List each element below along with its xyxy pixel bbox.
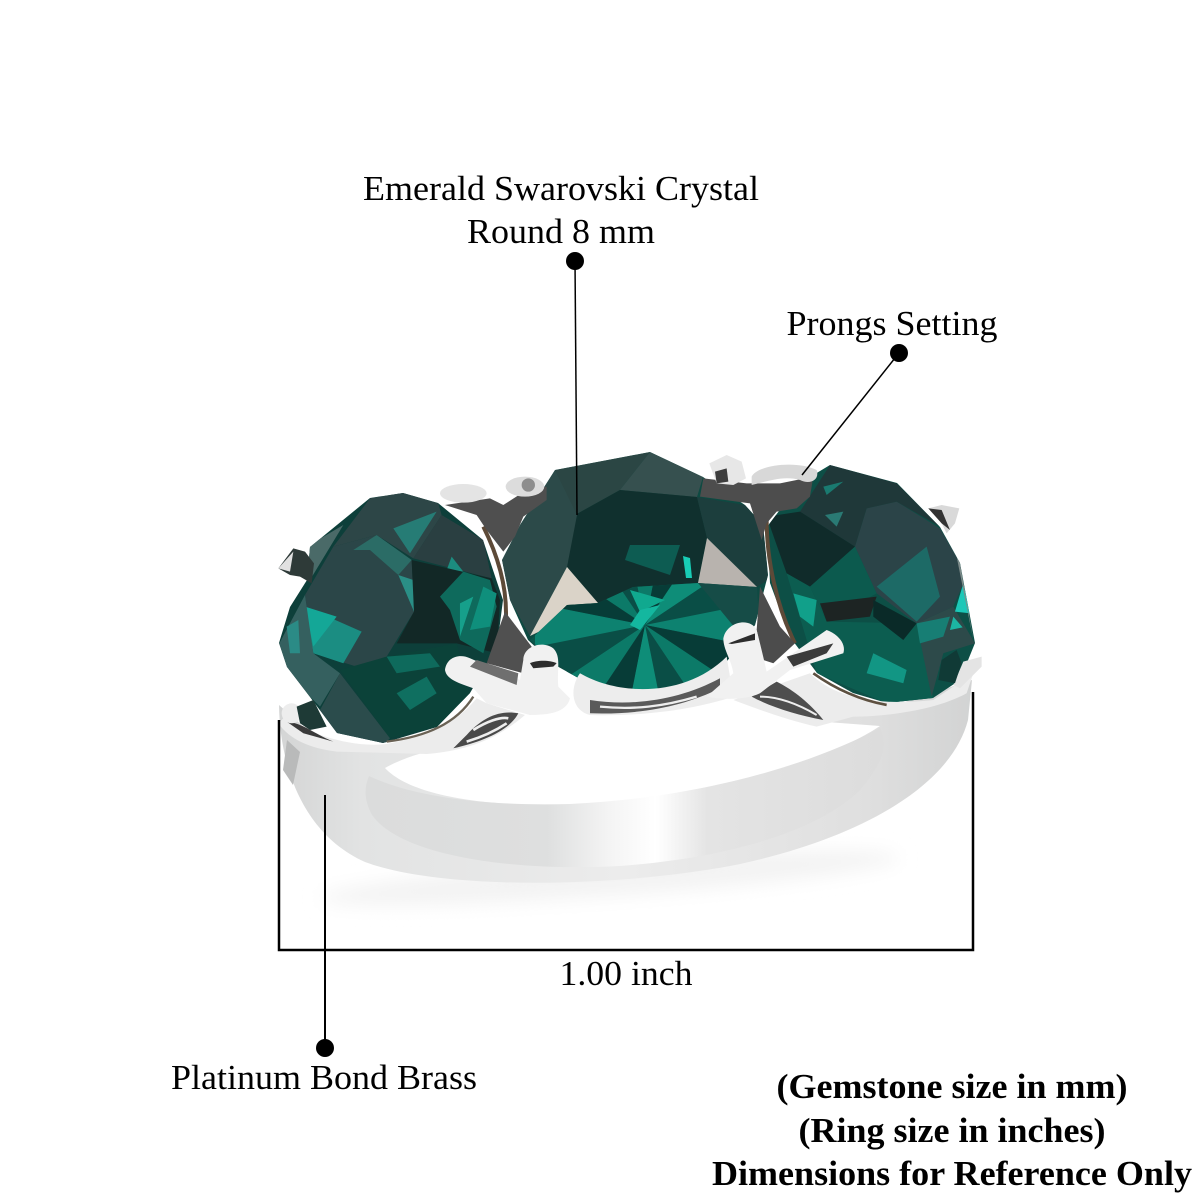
leader line — [802, 353, 899, 475]
bezel edge — [767, 520, 795, 643]
dimension label: 1.00 inch — [560, 954, 693, 993]
label: brass: Platinum Bond Brass — [171, 1058, 477, 1097]
side prong — [278, 548, 314, 583]
lower-left prong — [282, 703, 302, 723]
crossed prongs — [445, 645, 570, 715]
leader line — [324, 795, 326, 1048]
lower right prong — [953, 657, 982, 688]
right gemstone — [768, 465, 975, 702]
bracket lines — [279, 692, 973, 950]
note line 1: (Gemstone size in mm) — [776, 1067, 1128, 1106]
dimension bracket — [279, 692, 973, 993]
centre gemstone — [502, 452, 768, 690]
note: dimensions — [712, 1067, 1193, 1193]
label: round size: Round 8 mm — [467, 212, 655, 251]
left gemstone — [279, 493, 503, 743]
ring shadow — [319, 840, 901, 916]
crossed prongs — [707, 622, 844, 699]
note line 3: Dimensions for Reference Only — [712, 1154, 1193, 1193]
upper metal — [700, 477, 813, 540]
prong setting right — [573, 455, 982, 727]
label: prongs: Prongs Setting — [786, 304, 998, 343]
centre basket arc — [573, 657, 733, 715]
prong setting left — [278, 477, 570, 754]
left basket — [278, 698, 525, 754]
ring band — [279, 680, 972, 883]
leader line — [575, 261, 577, 515]
bezel edge — [483, 527, 506, 657]
lower dark post — [487, 612, 532, 673]
far prong — [928, 505, 959, 533]
ring illustration — [270, 448, 982, 916]
callout dot — [316, 1039, 334, 1057]
callout dot — [890, 344, 908, 362]
label: emerald crystal: Emerald Swarovski Crystal — [363, 169, 759, 208]
upper left metal — [445, 487, 547, 552]
right basket — [733, 673, 973, 727]
callout: emerald crystal — [363, 169, 759, 515]
callout dot — [566, 252, 584, 270]
callout: platinum bond brass — [171, 795, 477, 1097]
note line 2: (Ring size in inches) — [798, 1111, 1106, 1150]
callout: prongs setting — [786, 304, 998, 475]
infographic canvas — [172, 176, 1192, 1192]
